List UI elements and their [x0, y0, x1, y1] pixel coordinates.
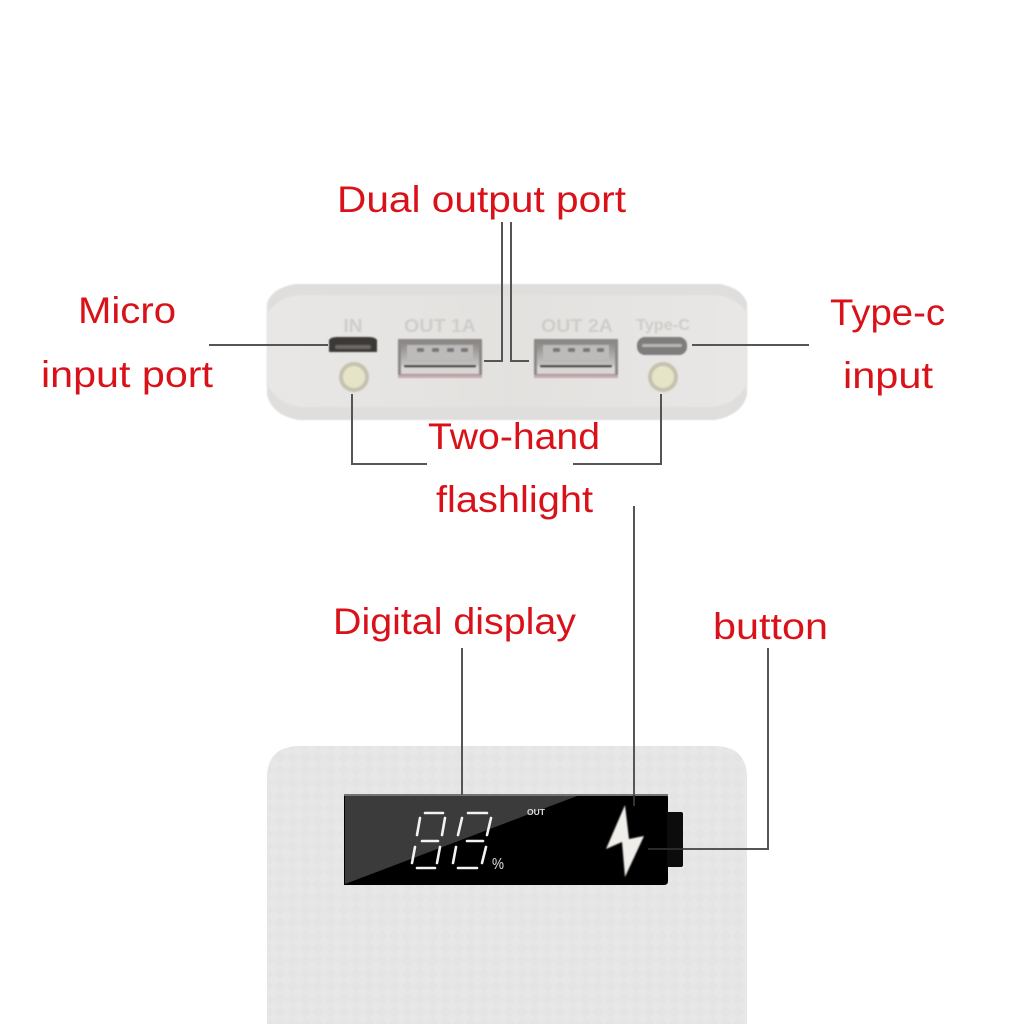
device outer shell	[267, 284, 747, 420]
device front body	[267, 746, 747, 1024]
label: Type-c input	[830, 292, 945, 396]
USB port 2	[534, 339, 618, 378]
label: Type-c input: Type-c	[830, 292, 945, 333]
label: Two-hand flashlight: Two-hand	[428, 416, 600, 457]
port label: Type-C: Type-C	[636, 317, 690, 334]
port label: OUT 1A: OUT 1A	[404, 316, 476, 336]
USB port 1	[398, 339, 482, 378]
flashlight LED left	[339, 362, 369, 392]
Type-C port	[637, 337, 687, 355]
icon: lightning bolt	[606, 805, 644, 877]
label: Digital display: Digital display	[333, 601, 577, 642]
micro USB port	[329, 337, 377, 352]
digit segments	[412, 813, 491, 868]
flashlight LED right	[648, 362, 678, 392]
OUT indicator: OUT	[527, 807, 546, 817]
label: Two-hand flashlight	[428, 416, 600, 520]
label: Micro input port: input port	[41, 354, 214, 395]
percent sign: %	[492, 856, 504, 873]
leader lines	[209, 222, 809, 849]
device end face	[267, 295, 747, 407]
port label: OUT 2A: OUT 2A	[541, 316, 613, 336]
panel: power bank front view	[267, 746, 747, 1024]
display bezel	[344, 794, 683, 885]
port label: IN: IN	[344, 316, 362, 336]
display highlight	[345, 796, 577, 884]
label: Micro input port: Micro	[78, 290, 176, 331]
battery nub	[667, 812, 683, 867]
label: button: button	[713, 606, 828, 647]
label: Two-hand flashlight: flashlight	[436, 479, 594, 520]
label: Micro input port	[41, 290, 214, 395]
panel: power bank end view with ports	[267, 284, 747, 420]
label: Type-c input: input	[843, 355, 934, 396]
heading: Dual output port: Dual output port	[337, 179, 627, 220]
